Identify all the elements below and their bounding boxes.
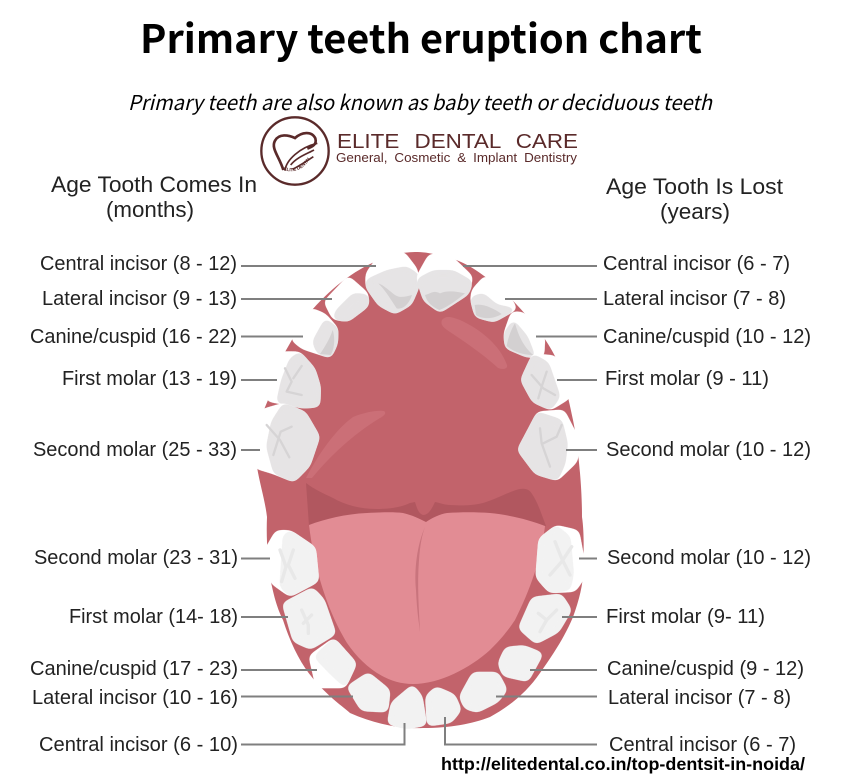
labels: comes in: Lateral incisor (9 - 13): [42, 288, 237, 310]
labels: lost: First molar (9 - 11): [605, 368, 769, 390]
labels: lost: Central incisor (6 - 7): [603, 253, 790, 275]
labels: comes in: First molar (13 - 19): [62, 368, 237, 390]
logo: Elite Dental Care: [260, 116, 578, 186]
tongue centre groove: [415, 527, 425, 632]
labels: lost: Lateral incisor (7 - 8): [608, 687, 791, 709]
website url: http://elitedental.co.in/top-dentsit-in-noida/: [441, 754, 805, 774]
upper right canine: [504, 312, 545, 357]
labels: lost: [603, 253, 811, 756]
lower teeth: [262, 525, 587, 729]
lower left second molar: [262, 531, 319, 597]
lower right first molar: [518, 594, 572, 644]
labels: lost: Canine/cuspid (9 - 12): [607, 658, 804, 680]
throat shadow: [306, 483, 546, 530]
labels: comes in: Second molar (23 - 31): [34, 547, 238, 569]
labels: lost: Second molar (10 - 12): [607, 547, 811, 569]
labels: lost: Central incisor (6 - 7): [609, 734, 796, 756]
heading: age tooth comes in: Age Tooth Comes In: [51, 172, 257, 197]
labels: lost: Second molar (10 - 12): [606, 439, 811, 461]
upper right second molar: [517, 410, 579, 481]
lower left lateral incisor: [347, 672, 390, 712]
upper right first molar: [521, 354, 571, 410]
leader lines right: [445, 266, 597, 744]
heading: age tooth is lost: [606, 174, 784, 224]
labels: comes in: [30, 253, 238, 756]
upper teeth: [251, 252, 579, 482]
subtitle: Primary teeth are also known as baby teeth or deciduous teeth: [128, 86, 714, 116]
upper left second molar: [251, 403, 320, 482]
heading: age tooth comes in: [51, 172, 257, 222]
mouth illustration: [251, 252, 587, 729]
title: Primary teeth eruption chart: [140, 9, 702, 65]
labels: lost: Canine/cuspid (10 - 12): [603, 326, 811, 348]
lower left central incisor: [387, 685, 427, 729]
lower right second molar: [536, 525, 587, 593]
lower left first molar: [282, 587, 336, 649]
upper left central incisor: [366, 252, 419, 314]
logo tagline: General, Cosmetic & Implant Dentistry: [336, 151, 578, 165]
labels: comes in: Lateral incisor (10 - 16): [32, 687, 238, 709]
upper left lateral incisor: [324, 276, 369, 321]
labels: comes in: Canine/cuspid (16 - 22): [30, 326, 237, 348]
heading: age tooth comes in: (months): [106, 197, 194, 222]
logo name: ELITE DENTAL CARE: [337, 131, 578, 153]
tongue: [309, 512, 545, 684]
lower right lateral incisor: [459, 672, 507, 712]
palate ridge left: [306, 411, 385, 478]
upper left canine: [291, 308, 338, 358]
labels: lost: First molar (9- 11): [606, 606, 765, 628]
upper right lateral incisor: [471, 276, 517, 322]
heading: age tooth is lost: Age Tooth Is Lost: [606, 174, 784, 199]
logo emblem: [260, 116, 330, 186]
upper right central incisor: [417, 254, 473, 313]
labels: comes in: Central incisor (6 - 10): [39, 734, 238, 756]
leader lines left: [241, 266, 404, 744]
labels: lost: Lateral incisor (7 - 8): [603, 288, 786, 310]
lower right central incisor: [426, 687, 461, 726]
labels: comes in: Canine/cuspid (17 - 23): [30, 658, 238, 680]
heading: age tooth is lost: (years): [660, 199, 730, 224]
palate ridge right: [441, 317, 507, 369]
logo emblem: ELITE DENTAL: [284, 158, 310, 172]
lower left canine: [309, 638, 357, 688]
labels: comes in: First molar (14- 18): [69, 606, 238, 628]
upper left first molar: [265, 352, 320, 408]
lower right canine: [498, 646, 543, 682]
labels: comes in: Central incisor (8 - 12): [40, 253, 237, 275]
palate and gums: [257, 252, 584, 728]
labels: comes in: Second molar (25 - 33): [33, 439, 237, 461]
